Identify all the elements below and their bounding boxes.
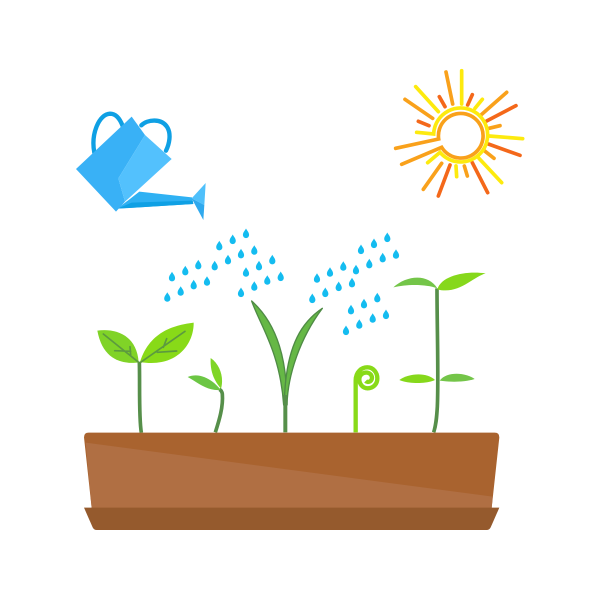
can handles [93, 114, 170, 153]
plant pot [84, 433, 499, 530]
seedling left leaf [97, 330, 139, 363]
pot body [84, 433, 499, 508]
seedling veins [103, 331, 185, 362]
plant: small sprout [188, 358, 222, 432]
yellow rays [416, 71, 523, 183]
lower left leaf [399, 374, 435, 383]
sun [396, 71, 523, 196]
can body [76, 117, 172, 212]
sun rings [396, 108, 488, 164]
grass right blade [284, 308, 322, 405]
seedling stem [139, 362, 141, 433]
seedling right leaf [140, 323, 194, 363]
plant: two-leaf seedling [97, 323, 194, 433]
sprout leaf top [211, 358, 222, 389]
lower right leaf [440, 374, 475, 382]
plant: grass blades [252, 301, 322, 432]
plant: tall seedling [393, 273, 486, 432]
sprout stem [215, 389, 222, 432]
top left leaf [393, 278, 437, 288]
can spout [117, 183, 206, 220]
sprout leaf left [188, 375, 221, 390]
plant: fiddlehead [356, 367, 377, 432]
watering can [76, 114, 206, 220]
water drops right [309, 232, 399, 335]
orange rays [405, 72, 507, 189]
tall stem [434, 288, 438, 432]
grass stem [279, 395, 291, 432]
water drops left [164, 228, 284, 302]
pot light facet [86, 443, 493, 508]
top right leaf [437, 273, 486, 290]
grass left blade [252, 301, 287, 405]
red rays [418, 95, 520, 196]
pot saucer [84, 508, 499, 530]
